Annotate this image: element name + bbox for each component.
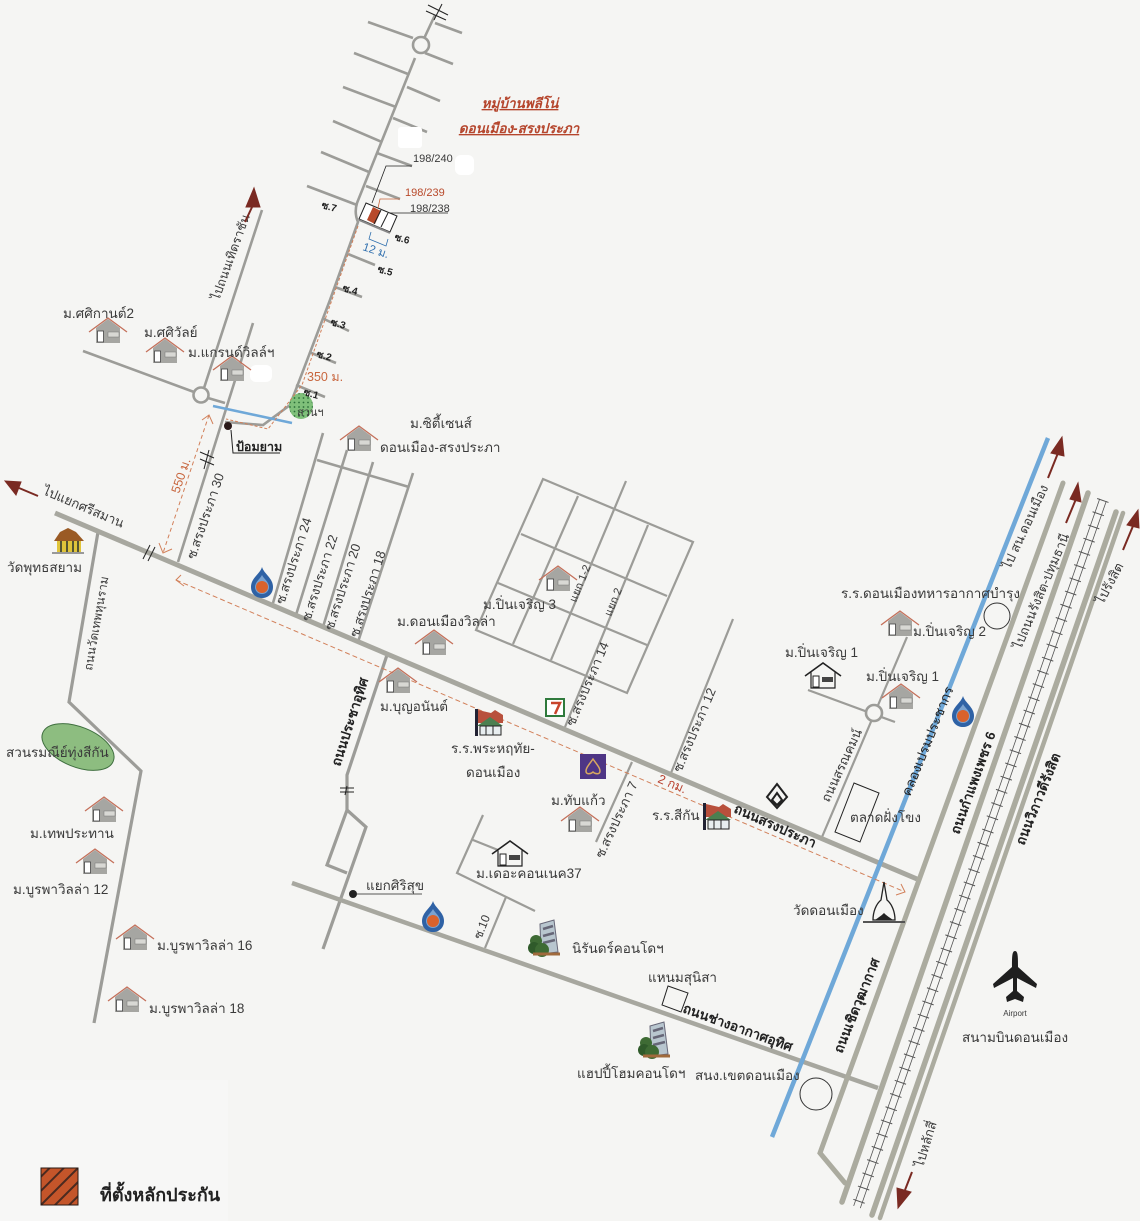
landmark: Naem Sunisa bbox=[648, 970, 717, 1012]
temple: Wat Don Mueang: วัดดอนเมือง bbox=[793, 903, 864, 918]
landmark: Naem Sunisa: แหนมสุนิสา bbox=[648, 970, 717, 986]
village: Citizen Don Mueang bbox=[340, 413, 500, 455]
village: Don Mueang Villa: ม.ดอนเมืองวิลล่า bbox=[397, 614, 496, 629]
dashed route to property bbox=[226, 226, 358, 429]
village: Bun Anan bbox=[379, 668, 448, 715]
rotated street labels: ซ.สรงประภา 24 bbox=[273, 516, 315, 606]
landmark: district office: สนง.เขตดอนเมือง bbox=[695, 1068, 800, 1083]
bold road names: ถนนเชิดวุฒากาศ bbox=[831, 956, 884, 1055]
guard post marker bbox=[224, 422, 282, 454]
2 km distance arrow bbox=[176, 575, 905, 895]
village: Pin Charoen 1 black: ม.ปิ่นเจริญ 1 bbox=[785, 643, 858, 660]
village: Citizen Don Mueang: ดอนเมือง-สรงประภา bbox=[380, 440, 500, 455]
village: Pin Charoen 3: ม.ปิ่นเจริญ 3 bbox=[483, 595, 556, 612]
title bbox=[459, 95, 581, 136]
airport icon: สนามบินดอนเมือง bbox=[962, 1030, 1068, 1045]
school: Phra Haruthai: ดอนเมือง bbox=[466, 765, 520, 780]
bank icon: SCB bbox=[580, 754, 606, 779]
village: The Connect 37 bbox=[476, 841, 582, 881]
village: Thap Kaeo: ม.ทับแก้ว bbox=[551, 793, 606, 808]
village: Burapha Villa 12: ม.บูรพาวิลล่า 12 bbox=[13, 882, 108, 898]
temple: Wat Phutthasayam: วัดพุทธสยาม bbox=[7, 560, 82, 576]
bold road names: ถนนสรงประภา bbox=[732, 801, 819, 851]
rotated street labels: แยก 1-2 bbox=[568, 563, 593, 604]
market: Talat Fang Khlong bbox=[835, 783, 921, 842]
7-Eleven icon bbox=[546, 699, 564, 716]
rotated street labels: ซ.สรงประภา 18 bbox=[347, 549, 389, 639]
distance labels: 2 กม. bbox=[656, 772, 689, 796]
soi number labels: ซ.6 bbox=[393, 232, 411, 247]
village: Grand Ville bbox=[188, 344, 274, 381]
rotated street labels: ซ.สรงประภา 14 bbox=[563, 640, 612, 728]
legend bbox=[0, 1080, 228, 1221]
school: Phra Haruthai bbox=[451, 709, 535, 780]
550 m distance arrow bbox=[159, 415, 213, 553]
road break marks bbox=[143, 4, 448, 795]
soi number labels: ซ.2 bbox=[315, 349, 333, 364]
distance labels bbox=[169, 370, 689, 796]
rotated street labels: ซ.สรงประภา 12 bbox=[670, 686, 719, 774]
village: Burapha Villa 12 bbox=[13, 849, 114, 898]
park: Thung Si Kan: สวนรมณีย์ทุ่งสีกัน bbox=[6, 744, 109, 761]
rotated street labels: ถนนสรณคมน์ bbox=[818, 726, 865, 804]
village: Pin Charoen 3 bbox=[483, 566, 577, 612]
rotated street labels: ซ.สรงประภา 20 bbox=[322, 542, 364, 632]
legend: ที่ตั้งหลักประกัน bbox=[100, 1181, 221, 1205]
road network: west and central streets bbox=[69, 210, 907, 1023]
lot number labels with leaders bbox=[372, 153, 453, 215]
bold road names: ถนนช่างอากาศอุทิศ bbox=[681, 1001, 795, 1055]
lot number labels with leaders: 198/239 bbox=[405, 187, 445, 199]
landmark: district office bbox=[695, 1068, 832, 1110]
village: Pin Charoen 2 bbox=[881, 611, 986, 639]
road: Chang Akat Uthit bbox=[292, 883, 878, 1088]
park label small: สวนฯ bbox=[297, 407, 324, 419]
village: Pin Charoen 1: ม.ปิ่นเจริญ 1 bbox=[866, 667, 939, 684]
rotated street labels: ไปถนนเทิดราชัน bbox=[208, 212, 253, 303]
title: ดอนเมือง-สรงประภา bbox=[459, 121, 581, 136]
main road: Songprapha bbox=[55, 513, 917, 879]
temple: Wat Phutthasayam bbox=[7, 528, 84, 576]
landmark: air force school: ร.ร.ดอนเมืองทหารอากาศบำรุง bbox=[841, 586, 1020, 602]
property plots bbox=[359, 203, 397, 233]
village: Burapha Villa 16: ม.บูรพาวิลล่า 16 bbox=[157, 938, 252, 954]
highway and railway corridor bbox=[820, 483, 1123, 1218]
stream near guard post bbox=[213, 406, 292, 423]
bold road names bbox=[329, 675, 1064, 1055]
school: Si Kan: ร.ร.สีกัน bbox=[652, 808, 700, 823]
park: Thung Si Kan bbox=[6, 714, 121, 780]
rotated street labels: ไปหลักสี่ bbox=[910, 1119, 940, 1170]
title: หมู่บ้านพลีโน่ bbox=[482, 95, 560, 112]
lot number labels with leaders: 198/240 bbox=[413, 153, 453, 165]
village: Bun Anan: ม.บุญอนันต์ bbox=[380, 698, 448, 715]
village: Burapha Villa 16 bbox=[116, 925, 252, 954]
bold road names: ถนนกำแพงเพชร 6 bbox=[948, 729, 999, 836]
rotated street labels: ซ.สรงประภา 7 bbox=[592, 779, 641, 860]
village: Burapha Villa 18 bbox=[108, 987, 244, 1017]
village: Sasiwan bbox=[144, 324, 198, 363]
rotated street labels: ไปถนนรังสิต-ปทุมธานี bbox=[1010, 531, 1073, 652]
village: Sasiwan: ม.ศศิวัลย์ bbox=[144, 324, 198, 340]
village: Burapha Villa 18: ม.บูรพาวิลล่า 18 bbox=[149, 1001, 244, 1017]
airport icon bbox=[962, 951, 1068, 1045]
plot width dimension 12 m: 12 ม. bbox=[361, 241, 390, 261]
distance labels: 550 ม. bbox=[169, 456, 194, 495]
soi number labels: ซ.5 bbox=[376, 264, 394, 279]
park: Suan Fa bbox=[289, 393, 313, 419]
condo: Happy Home bbox=[577, 1022, 685, 1081]
rotated street labels: ไปแยกศรีสมาน bbox=[40, 483, 126, 531]
rotated street labels: ซ.สรงประภา 30 bbox=[184, 471, 227, 561]
condo: Niran: นิรันดร์คอนโดฯ bbox=[572, 940, 664, 956]
rotated street labels: ไปรังสิต bbox=[1092, 560, 1127, 607]
soi number labels: ซ.4 bbox=[341, 283, 359, 298]
rotated street labels: ซ.สรงประภา 22 bbox=[299, 533, 341, 623]
village: Pin Charoen 2: ม.ปิ่นเจริญ 2 bbox=[913, 622, 986, 639]
village: Thep Prathan bbox=[30, 797, 123, 841]
rotated street labels: ไป สน.ดอนเมือง bbox=[999, 482, 1051, 572]
school: Phra Haruthai: ร.ร.พระหฤทัย- bbox=[451, 741, 535, 756]
bank icon: BBL bbox=[767, 784, 787, 808]
rotated street labels bbox=[40, 212, 1127, 1170]
condo: Happy Home: แฮปปี้โฮมคอนโดฯ bbox=[577, 1063, 685, 1081]
fuel station icons bbox=[251, 567, 974, 932]
village: The Connect 37: ม.เดอะคอนเนค37 bbox=[476, 866, 582, 881]
guard post marker: ป้อมยาม bbox=[236, 440, 282, 454]
village: Citizen Don Mueang: ม.ซิตี้เซนส์ bbox=[410, 413, 472, 431]
school: Si Kan bbox=[652, 803, 731, 830]
village: Pin Charoen 1 bbox=[866, 667, 939, 709]
bold road names: ถนนประชาอุทิศ bbox=[329, 675, 372, 768]
soi number labels bbox=[302, 200, 411, 402]
soi number labels: ซ.3 bbox=[329, 317, 347, 332]
road network: north soi bbox=[225, 15, 462, 425]
market: Talat Fang Khlong: ตลาดฝั่งโขง bbox=[850, 808, 921, 825]
lot number labels with leaders: 198/238 bbox=[410, 203, 450, 215]
rotated street labels: ซ.10 bbox=[471, 913, 493, 941]
airport icon: Airport bbox=[1003, 1009, 1028, 1018]
rotated street labels: คลองเปรมประชากร bbox=[899, 684, 956, 798]
white retouch patches bbox=[250, 127, 474, 382]
village: Thap Kaeo bbox=[551, 793, 606, 832]
village: Thep Prathan: ม.เทพประทาน bbox=[30, 826, 114, 841]
village: Sasikan 2 bbox=[63, 305, 134, 343]
soi number labels: ซ.7 bbox=[320, 200, 338, 215]
Sirisuk junction marker bbox=[349, 878, 424, 898]
landmark: air force school bbox=[841, 586, 1020, 629]
rotated street labels: ถนนวัดเทพหุนราม bbox=[81, 575, 112, 672]
village: Pin Charoen 1 black bbox=[785, 643, 858, 688]
plot width dimension 12 m bbox=[361, 232, 390, 261]
rotated street labels: แยก 2 bbox=[603, 586, 625, 618]
village: Grand Ville: ม.แกรนด์วิลล์ฯ bbox=[188, 344, 274, 360]
condo: Niran bbox=[528, 920, 664, 957]
canal: Prem Prachakon bbox=[772, 438, 1048, 1137]
Sirisuk junction marker: แยกศิริสุข bbox=[366, 878, 424, 894]
bold road names: ถนนวิภาวดีรังสิต bbox=[1013, 751, 1064, 847]
distance labels: 350 ม. bbox=[307, 370, 343, 384]
village: Sasikan 2: ม.ศศิกานต์2 bbox=[63, 305, 134, 321]
soi number labels: ซ.1 bbox=[302, 387, 320, 402]
temple: Wat Don Mueang bbox=[793, 882, 905, 922]
village: Don Mueang Villa bbox=[397, 614, 496, 655]
